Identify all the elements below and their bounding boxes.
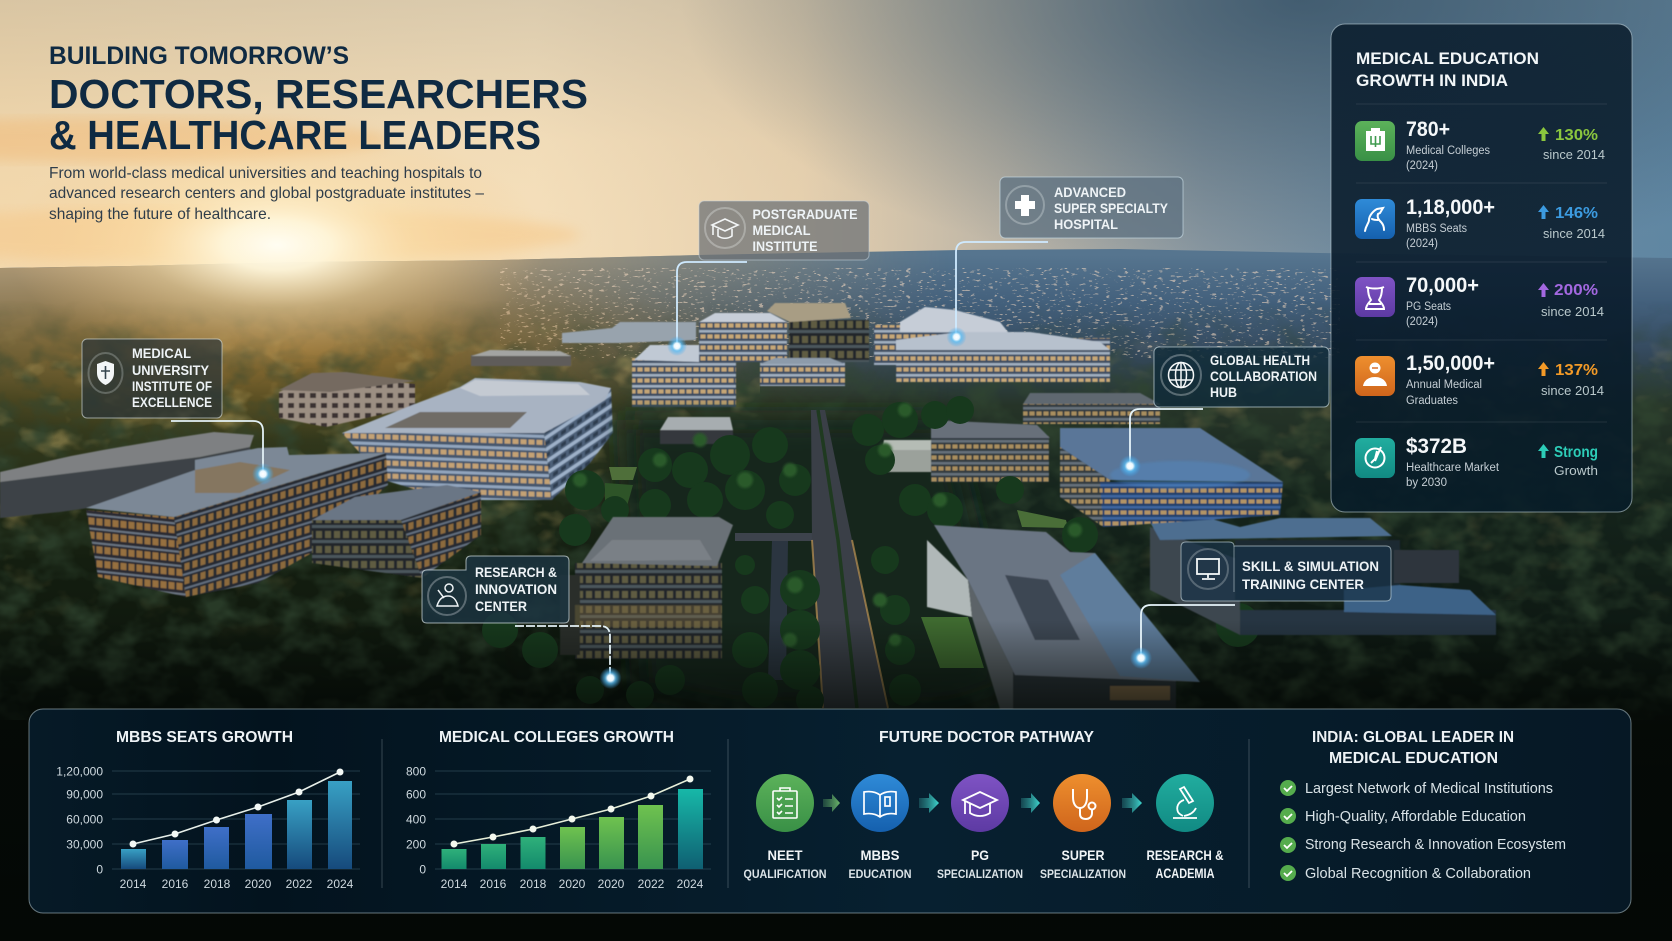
step: research: RESEARCH &	[1146, 847, 1224, 863]
callout: advanced super specialty hospital: HOSPITAL	[1054, 216, 1118, 232]
stat: mbbs seats	[1355, 196, 1605, 250]
stat: annual medical graduates: 137%	[1555, 362, 1598, 379]
callout: postgraduate medical institute: MEDICAL	[752, 222, 811, 238]
stat: healthcare market	[1355, 435, 1598, 489]
building O	[575, 563, 722, 659]
stat: healthcare market: Healthcare Market	[1406, 462, 1500, 474]
step: neet: QUALIFICATION	[744, 869, 826, 881]
stat: healthcare market: $372B	[1406, 435, 1467, 458]
chart: mbbs seats growth: 2020	[245, 877, 272, 891]
callout: research and innovation center: CENTER	[475, 598, 527, 614]
stat: medical colleges	[1355, 118, 1605, 172]
item 1: Largest Network of Medical Institutions	[1305, 781, 1553, 797]
callout: advanced super specialty hospital	[1000, 177, 1183, 238]
stat: medical colleges: since 2014	[1543, 148, 1605, 162]
connector: global hub	[1119, 409, 1203, 477]
callout: medical university: EXCELLENCE	[132, 394, 212, 410]
callout: postgraduate medical institute: POSTGRADUATE	[752, 206, 858, 222]
title	[49, 42, 588, 158]
callout: global health collaboration hub: COLLABORATION	[1210, 368, 1317, 384]
chart: medical colleges growth: 800	[406, 764, 426, 778]
chart: mbbs seats growth: 2018	[204, 877, 231, 891]
stat: mbbs seats: since 2014	[1543, 227, 1605, 241]
arrow	[1021, 793, 1040, 813]
intro text: advanced research centers and global postgraduate institutes –	[49, 185, 484, 202]
step: super: SPECIALIZATION	[1040, 869, 1126, 881]
intro text: From world-class medical universities and teaching hospitals to	[49, 165, 482, 182]
list heading: MEDICAL EDUCATION	[1329, 750, 1498, 767]
stat: healthcare market: Strong	[1554, 444, 1598, 461]
callout: skill and simulation training center	[1181, 542, 1391, 601]
icon: graduation cap	[705, 208, 745, 248]
chart: mbbs seats growth: 2014	[120, 877, 147, 891]
building M	[1150, 527, 1240, 635]
india: global leader list	[1280, 729, 1566, 882]
chart: mbbs seats growth: 2016	[162, 877, 189, 891]
step: pg	[937, 774, 1023, 881]
step: pg: SPECIALIZATION	[937, 869, 1023, 881]
callout: postgraduate medical institute: INSTITUTE	[752, 238, 818, 254]
list heading: INDIA: GLOBAL LEADER IN	[1312, 729, 1514, 746]
center cluster I	[874, 325, 954, 365]
panel heading	[1356, 49, 1539, 90]
building G	[632, 358, 736, 407]
chart: mbbs seats growth: 30,000	[66, 838, 103, 852]
stat: pg seats: (2024)	[1406, 316, 1438, 328]
stat: medical colleges: Medical Colleges	[1406, 145, 1490, 157]
stat: healthcare market: Growth	[1554, 464, 1598, 478]
bottom panel	[29, 709, 1631, 913]
icon: researcher	[428, 577, 466, 615]
callout: research and innovation center: INNOVATION	[475, 581, 557, 597]
step: research: ACADEMIA	[1156, 865, 1214, 881]
chart: mbbs seats growth: 60,000	[66, 812, 103, 826]
stat: medical colleges: 780+	[1406, 118, 1450, 141]
callout: medical university: MEDICAL	[132, 345, 191, 361]
panel heading: GROWTH IN INDIA	[1356, 71, 1508, 90]
small far building	[471, 355, 571, 366]
stat: annual medical graduates	[1355, 352, 1604, 407]
step: super	[1040, 774, 1126, 881]
stat: medical colleges: 130%	[1555, 127, 1598, 144]
callout: advanced super specialty hospital: SUPER SPECIALTY	[1054, 200, 1169, 216]
chart: medical colleges growth: 2020	[559, 877, 586, 891]
callout: skill and simulation training center: SKILL & SIMULATION	[1242, 558, 1379, 574]
connector: skill center	[1130, 605, 1235, 669]
chart: mbbs seats growth: 2024	[327, 877, 354, 891]
building K	[1060, 447, 1110, 527]
list heading	[1312, 729, 1514, 767]
intro text	[49, 165, 484, 223]
arrow	[919, 793, 939, 813]
icon: globe	[1161, 355, 1201, 395]
callout: research and innovation center: RESEARCH &	[475, 564, 557, 580]
stat: annual medical graduates: 1,50,000+	[1406, 352, 1495, 375]
future doctor pathway	[744, 729, 1224, 881]
chart: medical colleges growth: 2014	[441, 877, 468, 891]
callout: medical university: INSTITUTE OF	[132, 378, 212, 394]
chart: medical colleges growth: 0	[419, 862, 426, 876]
callout: medical university	[82, 339, 222, 418]
stat: annual medical graduates: Annual Medical	[1406, 379, 1482, 391]
step: neet	[744, 774, 826, 881]
future doctor pathway: FUTURE DOCTOR PATHWAY	[879, 729, 1094, 746]
chart: medical colleges growth: 400	[406, 812, 426, 826]
far left grey building	[0, 447, 252, 518]
central road and trees	[482, 393, 1260, 714]
chart: mbbs seats growth: 90,000	[66, 788, 103, 802]
center cluster H	[699, 322, 787, 362]
icon: monitor	[1188, 549, 1228, 589]
stat: mbbs seats: (2024)	[1406, 238, 1438, 250]
panel: medical education growth in india	[1331, 24, 1632, 512]
header block	[49, 42, 588, 223]
title: BUILDING TOMORROW’S	[49, 42, 349, 70]
stat: pg seats: 70,000+	[1406, 274, 1479, 297]
item 4: Global Recognition & Collaboration	[1305, 866, 1531, 882]
chart: mbbs seats growth: 1,20,000	[56, 764, 103, 778]
stat: pg seats: 200%	[1554, 282, 1598, 299]
far pair	[562, 322, 696, 343]
title: & HEALTHCARE LEADERS	[49, 112, 541, 158]
callout: medical university: UNIVERSITY	[132, 362, 210, 378]
step: super: SUPER	[1062, 847, 1104, 863]
stat: pg seats: PG Seats	[1406, 301, 1451, 313]
building C	[342, 433, 552, 500]
step: mbbs	[848, 774, 912, 881]
callout: postgraduate medical institute	[699, 201, 869, 260]
stat: healthcare market: by 2030	[1406, 477, 1447, 489]
step: mbbs: MBBS	[860, 847, 900, 863]
icon: shield	[88, 353, 122, 393]
connector: postgraduate	[667, 262, 747, 356]
step: pg: PG	[971, 847, 989, 863]
stat: mbbs seats: 1,18,000+	[1406, 196, 1495, 219]
building D	[312, 520, 422, 578]
connector: hospital	[946, 242, 1048, 347]
panel heading: MEDICAL EDUCATION	[1356, 49, 1539, 68]
step: mbbs: EDUCATION	[848, 869, 912, 881]
chart: mbbs seats growth: 2022	[286, 877, 313, 891]
building N	[927, 540, 972, 617]
callout: global health collaboration hub	[1154, 347, 1329, 407]
stat: pg seats: since 2014	[1541, 305, 1604, 319]
chart: medical colleges growth: 2020	[598, 877, 625, 891]
arrow	[1122, 793, 1142, 813]
chart: medical colleges growth: 2018	[520, 877, 547, 891]
chart: medical colleges growth: MEDICAL COLLEGES GROWTH	[439, 729, 674, 746]
stat: medical colleges: (2024)	[1406, 160, 1438, 172]
chart: medical colleges growth: 600	[406, 788, 426, 802]
chart: medical colleges growth: 2022	[638, 877, 665, 891]
tan building back	[279, 376, 415, 427]
step: research	[1146, 774, 1224, 881]
building A	[86, 510, 186, 597]
callout: skill and simulation training center: TRAINING CENTER	[1242, 576, 1364, 592]
icon: medical cross	[1006, 186, 1044, 224]
connector: university	[171, 421, 274, 485]
step: neet: NEET	[768, 847, 803, 863]
callout: global health collaboration hub: GLOBAL HEALTH	[1210, 352, 1310, 368]
chart: medical colleges growth: 200	[406, 838, 426, 852]
intro text: shaping the future of healthcare.	[49, 206, 271, 223]
callout: research and innovation center	[422, 556, 569, 623]
stat: pg seats	[1355, 274, 1604, 328]
arrow	[823, 794, 840, 812]
callout: global health collaboration hub: HUB	[1210, 384, 1237, 400]
chart: mbbs seats growth: MBBS SEATS GROWTH	[116, 729, 293, 746]
aerial campus background	[0, 0, 1672, 709]
stat: annual medical graduates: Graduates	[1406, 395, 1458, 407]
chart: mbbs seats growth: 0	[96, 862, 103, 876]
chart: medical colleges growth: 2016	[480, 877, 507, 891]
item 2: High-Quality, Affordable Education	[1305, 809, 1526, 825]
stat: annual medical graduates: since 2014	[1541, 384, 1604, 398]
item 3: Strong Research & Innovation Ecosystem	[1305, 837, 1566, 853]
chart: mbbs seats growth	[56, 729, 360, 891]
connector: research	[515, 626, 622, 689]
title: DOCTORS, RESEARCHERS	[49, 71, 588, 117]
chart: medical colleges growth: 2024	[677, 877, 704, 891]
callout: advanced super specialty hospital: ADVANCED	[1054, 184, 1126, 200]
stat: mbbs seats: 146%	[1555, 205, 1598, 222]
chart: medical colleges growth	[406, 729, 711, 891]
stat: mbbs seats: MBBS Seats	[1406, 223, 1467, 235]
